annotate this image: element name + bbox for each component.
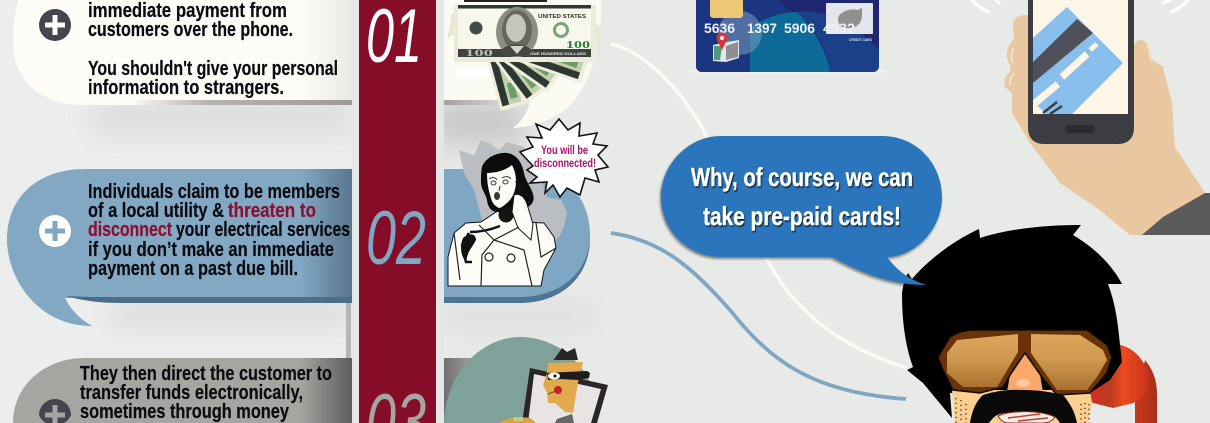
connector: white curve xyxy=(611,44,907,368)
top sliver of rear bill xyxy=(464,0,547,2)
illustration: hand holding phone xyxy=(972,0,1210,235)
fanned bills xyxy=(482,28,589,111)
nose highlight xyxy=(1016,379,1030,387)
text: step 2: if you don’t make an immediate xyxy=(88,238,334,261)
hair xyxy=(902,225,1122,418)
panel: step 1 right bubble tail xyxy=(444,0,601,128)
bill denomination: 100 xyxy=(566,40,590,51)
speech text xyxy=(691,162,913,231)
map pin xyxy=(713,32,739,62)
text: step 1: You shouldn't give your personal xyxy=(88,57,338,80)
head xyxy=(543,362,583,413)
thumbnail xyxy=(1147,43,1151,60)
text: step 2: of a local utility & xyxy=(88,199,224,222)
speech text: take pre-paid cards! xyxy=(703,201,901,231)
face xyxy=(952,390,1092,423)
red centre column xyxy=(352,0,444,423)
bill heading: UNITED STATES xyxy=(538,14,586,20)
card number: 5906 xyxy=(784,20,815,36)
payment card on screen xyxy=(1033,7,1122,114)
back bills xyxy=(447,8,602,58)
card label: CREDIT CARD xyxy=(849,37,872,42)
card number: 1397 xyxy=(747,20,777,36)
panel: step 1 left bubble xyxy=(13,0,352,105)
number 02: 02 xyxy=(366,196,426,281)
speech text: Why, of course, we can xyxy=(691,162,913,192)
illustration: woman on phone xyxy=(448,140,567,286)
coil cord xyxy=(498,208,514,222)
panel: step 3 right bubble xyxy=(444,337,597,423)
phone xyxy=(1028,0,1134,144)
card number xyxy=(704,20,855,36)
white coat and body xyxy=(448,210,556,286)
illustration: money xyxy=(447,0,602,111)
callout text: You will be xyxy=(541,143,588,157)
text: step 3: sometimes through money xyxy=(80,400,289,423)
connector strip xyxy=(346,303,351,359)
hair xyxy=(481,153,534,212)
eye xyxy=(548,372,560,380)
bag xyxy=(500,417,536,423)
home slot xyxy=(1065,125,1095,133)
handset xyxy=(514,181,526,197)
text: step 2: your electrical services xyxy=(176,218,350,241)
illustration: burglar xyxy=(500,348,608,423)
text: step 3: They then direct the customer to xyxy=(80,362,332,385)
bag clasp xyxy=(513,417,523,421)
panel: step 2 right bubble xyxy=(444,169,590,303)
coat lines xyxy=(454,223,556,286)
nose xyxy=(1007,345,1043,392)
panel: step 2 left bubble xyxy=(7,169,356,326)
sunglasses xyxy=(938,330,1112,395)
face xyxy=(487,165,516,208)
mouth stripes xyxy=(1008,414,1048,421)
icon: plus on blue xyxy=(39,215,71,247)
starburst callout xyxy=(520,119,608,197)
background shadows xyxy=(90,100,594,328)
card number: 5636 xyxy=(704,20,735,36)
red telephone xyxy=(1083,345,1157,423)
checked collar xyxy=(555,414,574,423)
connector: blue curve xyxy=(611,233,906,399)
text: step 2: disconnect xyxy=(88,218,172,241)
text: step 2: threaten to xyxy=(228,199,316,222)
mouth xyxy=(998,412,1055,423)
illustration: credit card xyxy=(690,0,885,73)
text: step 1: information to strangers. xyxy=(88,76,284,99)
knuckle highlights xyxy=(1010,48,1014,85)
starburst callout: disconnected! xyxy=(534,156,596,170)
hand on phone xyxy=(512,194,533,240)
text: step 2: Individuals claim to be members xyxy=(88,180,340,203)
grey splash xyxy=(459,140,567,250)
cord and left hand xyxy=(462,226,500,262)
sleeve xyxy=(1142,193,1210,235)
text: step 1 xyxy=(88,0,338,99)
text: step 3: transfer funds electronically, xyxy=(80,381,303,404)
red nose xyxy=(554,386,562,394)
eyes and mouth xyxy=(489,177,511,191)
hand xyxy=(1004,15,1210,235)
chip xyxy=(710,0,743,18)
illustration: man with sunglasses xyxy=(902,225,1157,423)
speech bubble xyxy=(661,136,942,285)
picture frame xyxy=(522,368,608,423)
text: step 3 xyxy=(80,362,332,423)
buttons xyxy=(485,253,515,262)
panel: step 3 left bubble xyxy=(13,358,352,423)
signal arcs xyxy=(972,0,1188,12)
text: step 2: payment on a past due bill. xyxy=(88,257,298,280)
piggy panel xyxy=(826,3,873,34)
mouth xyxy=(494,192,500,200)
bill footer: ONE HUNDRED DOLLARS xyxy=(530,51,586,56)
bill left denomination: 100 xyxy=(465,48,494,58)
icon: plus grey xyxy=(39,399,71,423)
text: step 1: customers over the phone. xyxy=(88,18,293,41)
stubble xyxy=(956,398,1089,423)
main bill xyxy=(454,5,596,62)
moustache xyxy=(970,390,1077,423)
icon: plus dark xyxy=(39,9,71,41)
hair xyxy=(553,348,578,360)
mask xyxy=(547,371,590,380)
card number: 4532 xyxy=(823,20,855,36)
shadow under right tail xyxy=(430,100,525,145)
screen xyxy=(1033,0,1128,114)
